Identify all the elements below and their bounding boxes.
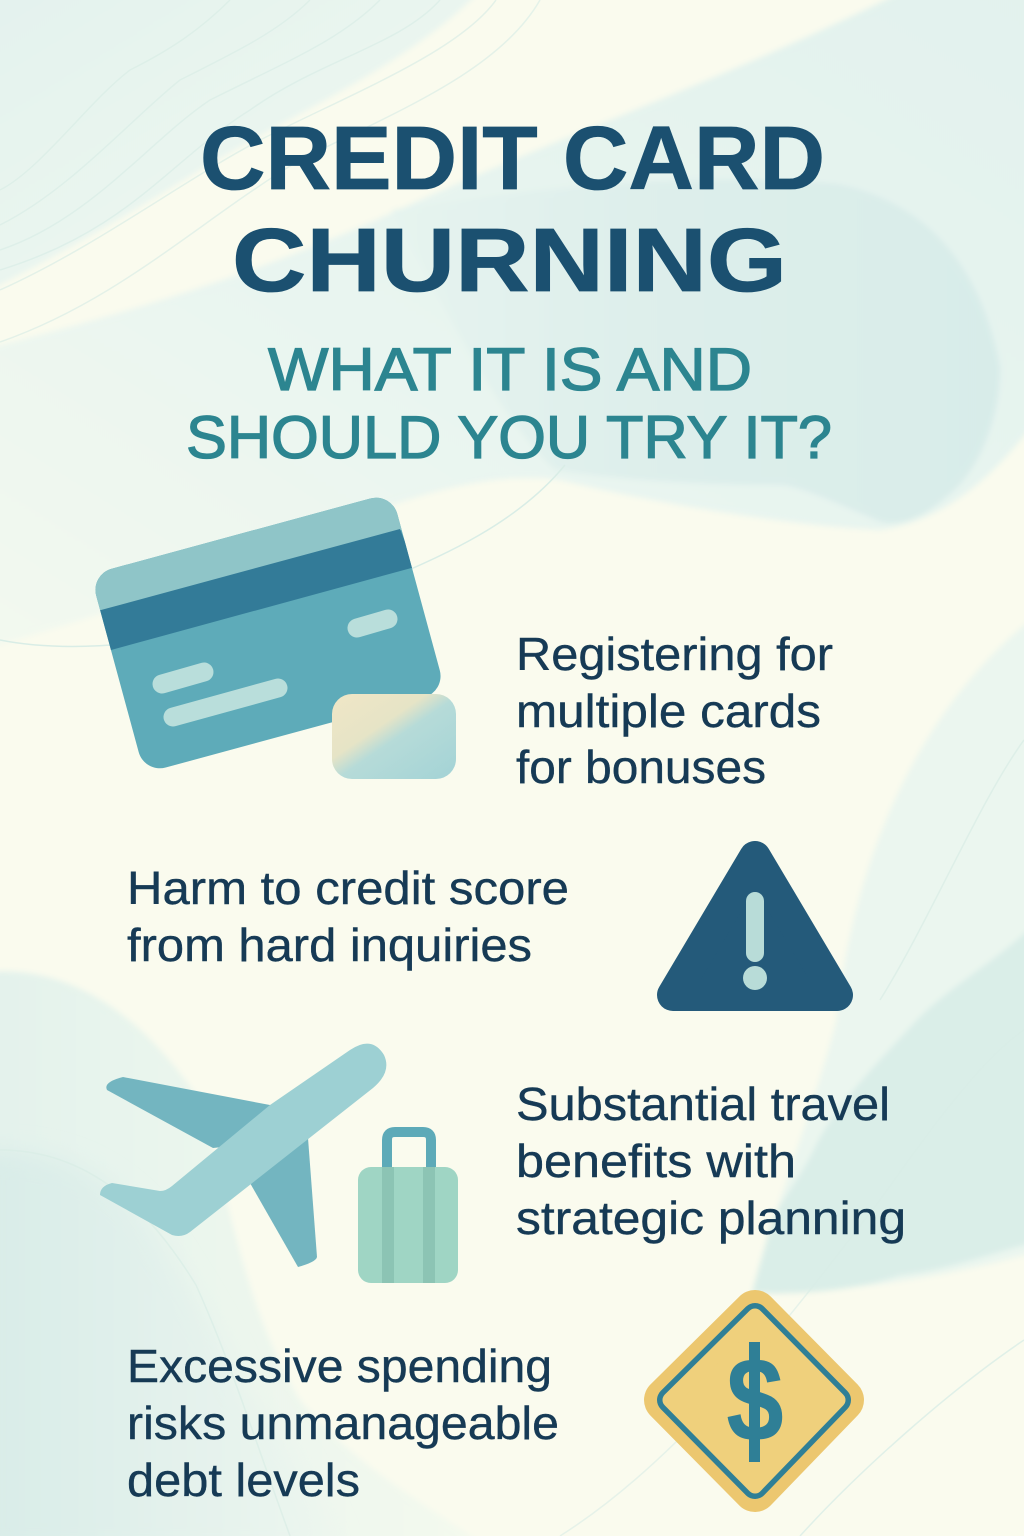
text: travel: strategic planning (516, 1192, 906, 1244)
text: harm: from hard inquiries (127, 919, 532, 971)
title: CHURNING (232, 211, 787, 311)
text: travel: benefits with (516, 1135, 796, 1187)
text: spending: Excessive spending (127, 1340, 552, 1392)
icon: suitcase (358, 1132, 458, 1283)
icon: credit card (95, 498, 456, 779)
subtitle: SHOULD YOU TRY IT? (186, 404, 832, 471)
text: travel: Substantial travel (516, 1078, 890, 1130)
title (200, 109, 825, 311)
text: harm (127, 862, 569, 971)
text: spending: risks unmanageable (127, 1397, 559, 1449)
icon: dollar diamond (666, 1312, 842, 1490)
text: registering: Registering for (516, 628, 833, 680)
subtitle (186, 336, 832, 471)
title: CREDIT CARD (200, 109, 825, 209)
text: harm: Harm to credit score (127, 862, 569, 914)
text: registering: multiple cards (516, 685, 821, 737)
icon: dollar diamond: $ (726, 1333, 784, 1467)
icon: warning triangle (673, 857, 837, 995)
text: spending (127, 1340, 559, 1506)
text: registering (516, 628, 833, 793)
text: registering: for bonuses (516, 741, 766, 793)
text: travel (516, 1078, 906, 1244)
text: spending: debt levels (127, 1454, 360, 1506)
subtitle: WHAT IT IS AND (268, 336, 752, 403)
icon: airplane (100, 1044, 386, 1267)
